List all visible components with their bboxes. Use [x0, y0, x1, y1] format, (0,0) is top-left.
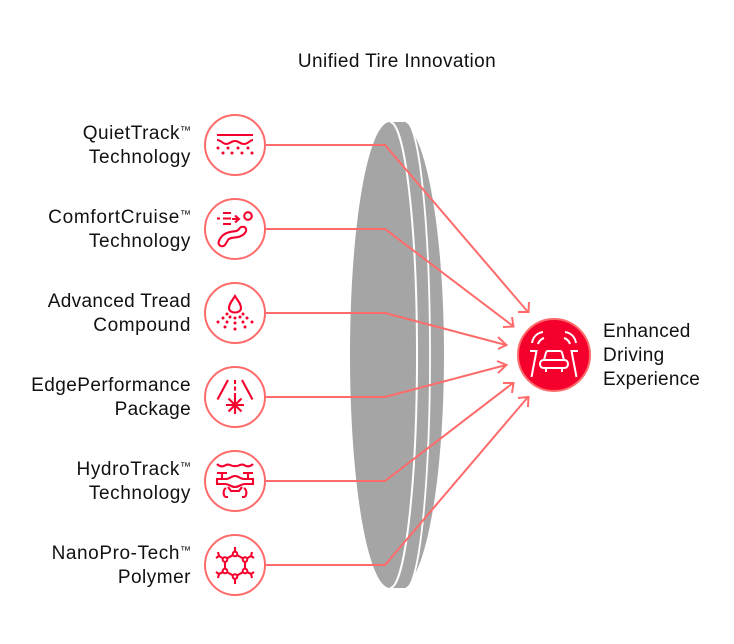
label: EdgePerformance: EdgePerformance	[31, 375, 191, 396]
arrow: NanoPro-Tech to result	[266, 397, 528, 565]
label: HydroTrack: Technology	[89, 483, 191, 504]
arrow: QuietTrack to result	[266, 145, 529, 312]
label: NanoPro-Tech: ™	[180, 545, 191, 557]
label: HydroTrack: HydroTrack	[77, 459, 180, 480]
label: ComfortCruise: ™	[180, 209, 191, 221]
icon: Advanced Tread	[205, 283, 265, 343]
label: EdgePerformance: Package	[115, 399, 191, 420]
label: ComfortCruise: ComfortCruise	[48, 207, 180, 228]
label: ComfortCruise: Technology	[89, 231, 191, 252]
label: Advanced Tread: Advanced Tread	[48, 291, 191, 312]
lens shape	[350, 120, 444, 590]
arrow: Advanced Tread to result	[266, 313, 506, 349]
label: Enhanced Driving Experience: Enhanced	[603, 321, 691, 342]
icon: Enhanced Driving Experience	[518, 319, 590, 391]
icon: NanoPro-Tech	[205, 535, 265, 595]
arrow: EdgePerformance to result	[266, 361, 506, 397]
icon: ComfortCruise	[205, 199, 265, 259]
label: Enhanced Driving Experience: Driving	[603, 345, 665, 366]
label: QuietTrack: QuietTrack	[83, 123, 180, 144]
arrow: HydroTrack to result	[266, 383, 514, 481]
title: Unified Tire Innovation	[298, 51, 496, 72]
icon: QuietTrack	[205, 115, 265, 175]
label: QuietTrack: Technology	[89, 147, 191, 168]
icon: HydroTrack	[205, 451, 265, 511]
icon: EdgePerformance	[205, 367, 265, 427]
label: Advanced Tread: Compound	[93, 315, 191, 336]
label: NanoPro-Tech: Polymer	[118, 567, 191, 588]
label: NanoPro-Tech: NanoPro-Tech	[52, 543, 180, 564]
label: HydroTrack: ™	[180, 461, 191, 473]
label: Enhanced Driving Experience: Experience	[603, 369, 700, 390]
label: QuietTrack: ™	[180, 125, 191, 137]
arrow: ComfortCruise to result	[266, 229, 514, 327]
